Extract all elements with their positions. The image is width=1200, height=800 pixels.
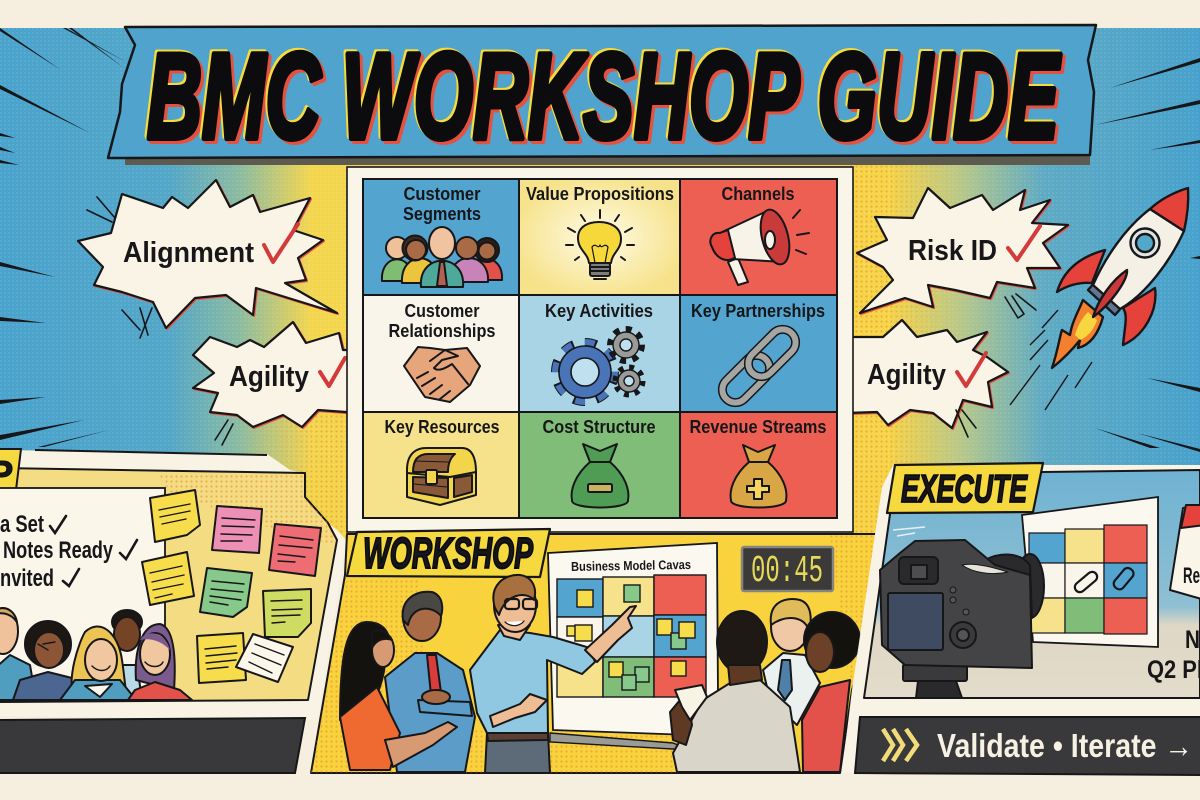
progress bar: left footer	[0, 718, 305, 773]
cell: Key Resources	[363, 412, 519, 518]
tag: EXECUTE: EXECUTE	[901, 468, 1028, 511]
workshop people	[340, 575, 860, 773]
burst: Agility right	[845, 320, 1008, 437]
person: woman in red	[802, 612, 860, 772]
check mark	[320, 358, 345, 386]
burst: Agility left	[193, 322, 360, 445]
person: presenter	[470, 575, 636, 773]
countdown timer: 00:45	[751, 550, 823, 593]
cell: Customer Segments: Customer	[404, 184, 480, 204]
person: man with red tie	[385, 592, 475, 772]
icon: camera	[880, 540, 1044, 698]
cell: Customer Relationships: Customer	[404, 301, 480, 321]
icon: light bulb	[566, 210, 634, 279]
person: man from behind	[670, 611, 800, 772]
panel: EXECUTE	[842, 463, 1200, 773]
comic sky background with halftone	[0, 28, 1200, 545]
icon: chain	[717, 324, 801, 408]
tag: WORKSHOP: WORKSHOP	[363, 529, 533, 578]
tag	[0, 449, 21, 498]
icon: people	[382, 227, 502, 287]
cell: Value Propositions	[519, 179, 680, 295]
icon: megaphone	[710, 207, 809, 285]
burst: Risk ID: Risk ID	[908, 235, 997, 267]
cell: Cost Structure	[519, 412, 680, 518]
cell: Customer Segments: Segments	[403, 204, 481, 224]
icon: gears	[555, 329, 643, 402]
burst: Risk ID	[857, 188, 1068, 318]
group of people	[0, 608, 192, 700]
cell: Customer Segments	[363, 179, 519, 295]
icon: treasure chest	[407, 448, 476, 505]
cell: Key Partnerships: Key Partnerships	[691, 301, 825, 321]
icon: rocket	[1010, 188, 1188, 410]
check mark	[264, 224, 298, 262]
person: woman in orange	[340, 622, 457, 770]
burst: Agility right: Agility	[867, 359, 946, 391]
burst: Alignment	[78, 180, 337, 338]
checklist page: Notes Ready	[3, 537, 113, 564]
checklist page	[0, 488, 165, 700]
person: blond man	[763, 599, 820, 725]
tag: EXECUTE	[887, 463, 1043, 513]
title banner	[108, 25, 1096, 165]
cell: Customer Relationships	[363, 295, 519, 412]
cell: Key Activities: Key Activities	[545, 301, 653, 321]
mini canvas	[557, 575, 706, 697]
poster of canvas	[1022, 497, 1158, 647]
countdown timer	[742, 547, 833, 593]
mini sticky notes	[567, 585, 695, 690]
cell: Channels: Channels	[722, 184, 794, 204]
cell: Key Resources: Key Resources	[384, 417, 500, 437]
icon: gold money bag	[731, 445, 786, 508]
icon: calendar	[1170, 505, 1200, 600]
cell: Revenue Streams: Revenue Streams	[690, 417, 826, 437]
cell: Value Propositions: Value Propositions	[526, 184, 674, 204]
cell: Channels	[680, 179, 837, 295]
panel: WORKSHOP	[311, 529, 882, 773]
footer bar: Validate Iterate	[855, 717, 1200, 775]
check mark	[957, 353, 986, 386]
checklist page: nvited	[0, 565, 54, 592]
icon: chevrons	[883, 729, 917, 761]
sticky notes	[142, 490, 321, 683]
icon: handshake	[404, 347, 480, 402]
cell: Key Activities	[519, 295, 680, 412]
burst: Agility left: Agility	[229, 361, 309, 393]
speed lines	[0, 28, 1200, 452]
checklist page: a Set	[0, 511, 44, 538]
whiteboard	[548, 543, 718, 750]
cell: Cost Structure: Cost Structure	[542, 417, 656, 437]
panel: canvas grid	[347, 167, 853, 532]
panel: PREP	[0, 449, 346, 720]
cell: Key Partnerships	[680, 295, 837, 412]
cell: Revenue Streams	[680, 412, 837, 518]
whiteboard: Business Model Cavas	[571, 557, 691, 574]
note text	[1147, 626, 1200, 684]
burst: Alignment: Alignment	[123, 237, 254, 269]
icon: green money bag	[572, 444, 628, 508]
cell: Customer Relationships: Relationships	[388, 321, 496, 341]
check mark	[1008, 226, 1040, 260]
tag: WORKSHOP	[347, 529, 550, 578]
